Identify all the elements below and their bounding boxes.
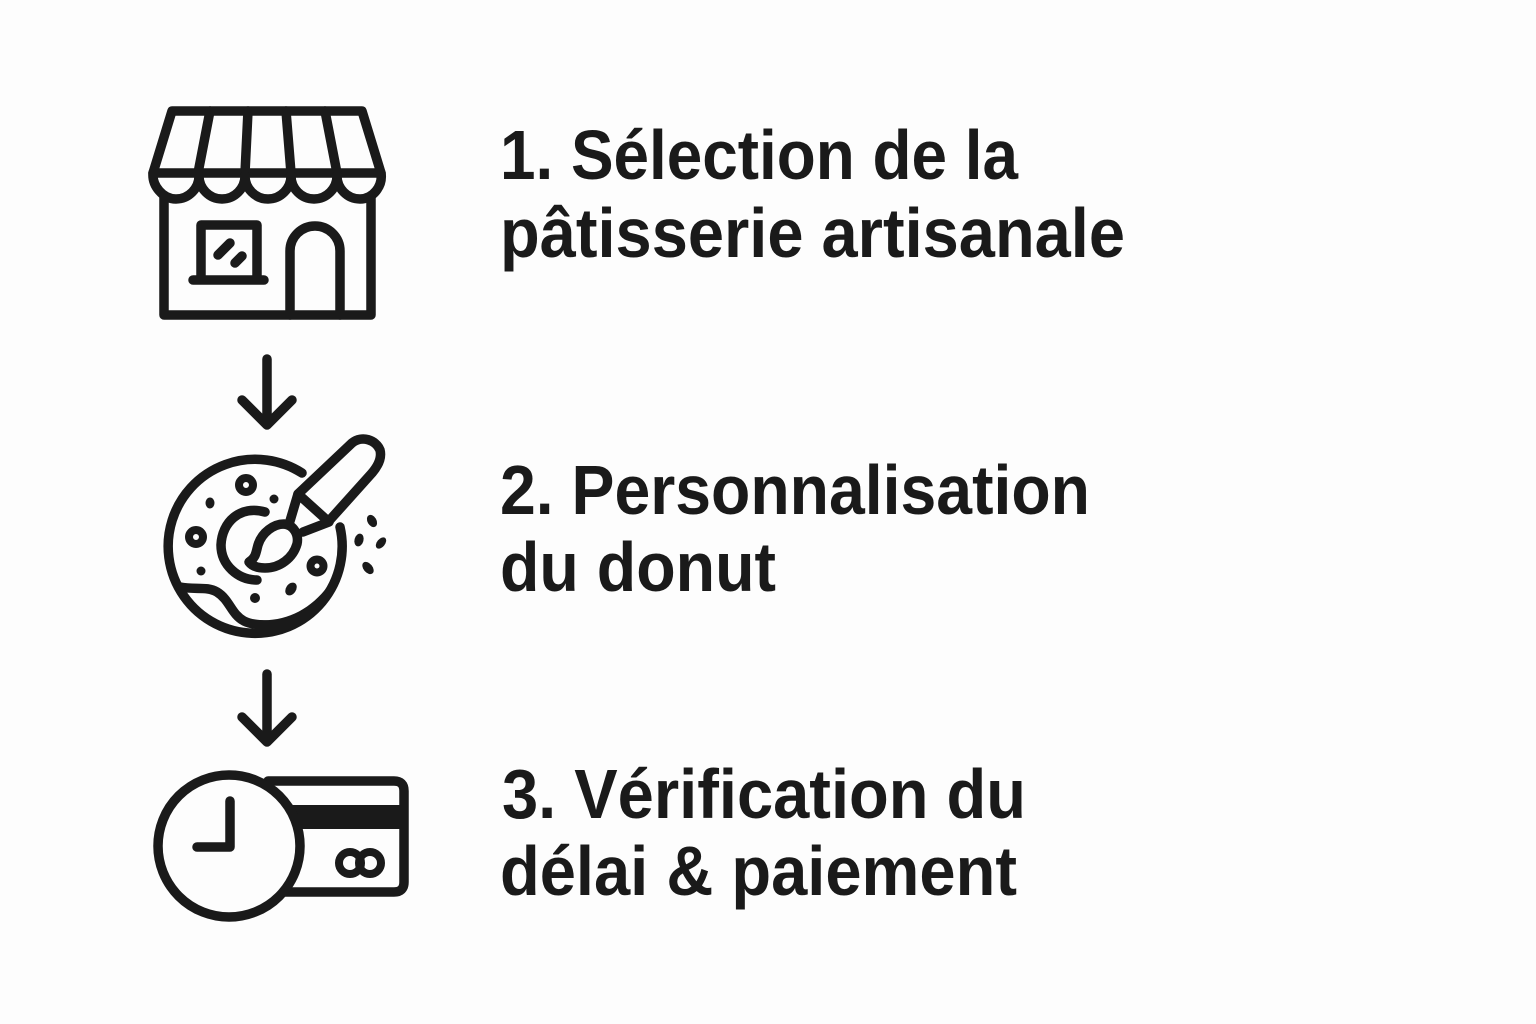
icon: donut with brush	[168, 439, 388, 634]
inner ring	[221, 510, 265, 580]
card stripe	[285, 805, 405, 829]
clock hands	[197, 801, 230, 847]
clock face	[158, 775, 300, 917]
arrow 2	[242, 674, 292, 742]
step 1 text: 1. Sélection de la	[500, 116, 1019, 194]
card logo	[339, 852, 381, 874]
glaze thick edge	[258, 586, 332, 634]
step 1 text: pâtisserie artisanale	[500, 194, 1125, 272]
sprinkle dots	[196, 494, 388, 603]
brush handle	[298, 439, 381, 522]
window glass marks	[218, 243, 242, 263]
icon: clock and credit card	[158, 775, 405, 917]
awning stripes	[198, 111, 337, 173]
step 2 text	[500, 451, 1090, 606]
icon: storefront	[153, 111, 381, 315]
glaze drip	[180, 587, 270, 625]
window	[193, 225, 264, 280]
step 1 text	[500, 116, 1125, 272]
step 3 text	[500, 755, 1026, 910]
awning scallops	[153, 173, 381, 199]
step 3 text: 3. Vérification du	[502, 755, 1026, 833]
donut outline	[168, 459, 342, 633]
step 2 text: 2. Personnalisation	[500, 451, 1090, 529]
brush head	[249, 524, 297, 568]
sprinkle rings	[189, 478, 324, 572]
step 2 text: du donut	[500, 528, 776, 606]
card outline	[268, 781, 404, 892]
door	[290, 226, 340, 315]
awning	[153, 111, 381, 173]
arrow 1	[242, 359, 292, 425]
shop walls	[164, 196, 371, 315]
step 3 text: délai & paiement	[500, 832, 1017, 910]
brush ferrule	[290, 494, 329, 532]
